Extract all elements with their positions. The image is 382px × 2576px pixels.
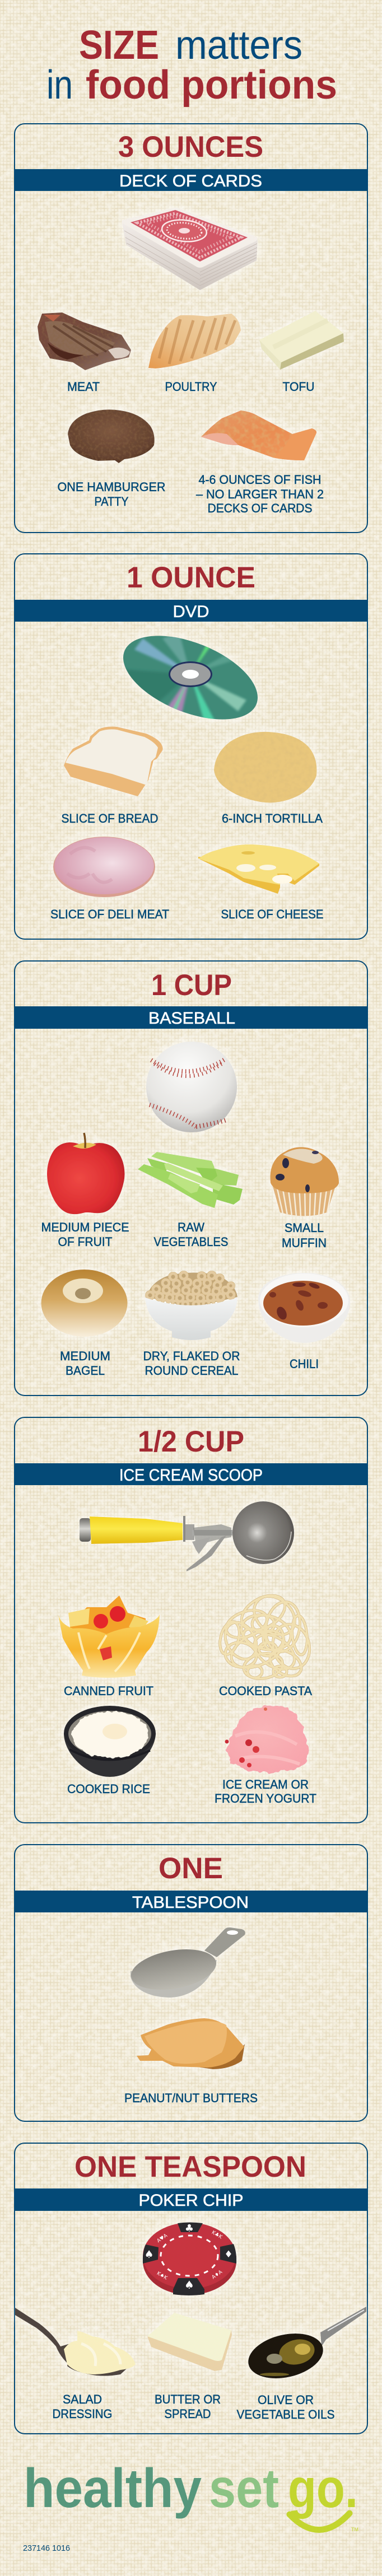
band: poker chip: POKER CHIP — [139, 2191, 243, 2210]
label: bagel — [60, 1349, 110, 1378]
icon: baseball — [146, 1042, 237, 1132]
label: cereal — [143, 1349, 240, 1378]
label: chili: CHILI — [290, 1357, 319, 1371]
label: one hamburger patty — [57, 480, 166, 508]
icon: poker chip: ♦ — [224, 2249, 233, 2260]
heading: 1/2 cup: 1/2 CUP — [138, 1425, 244, 1458]
icon: cheese — [198, 844, 319, 894]
label: small muffin: MUFFIN — [282, 1236, 327, 1250]
icon: ice cream scoop — [80, 1501, 294, 1571]
band: tablespoon — [14, 1891, 368, 1912]
label: fruit — [41, 1220, 129, 1249]
code number: 237146 1016 — [23, 2544, 70, 2553]
icon: poker chip — [143, 2222, 236, 2295]
icon: canned fruit — [58, 1595, 160, 1678]
label: fish: – NO LARGER THAN 2 — [196, 487, 324, 501]
label: butter or spread: SPREAD — [165, 2407, 211, 2421]
icon: butter — [147, 2313, 232, 2371]
icon: bread — [64, 727, 163, 796]
label: ice cream or frozen yogurt — [215, 1777, 316, 1805]
label: cooked pasta: COOKED PASTA — [219, 1684, 312, 1698]
title: in — [46, 63, 73, 108]
icon: chili — [258, 1273, 350, 1343]
label: poultry: POULTRY — [165, 380, 217, 394]
label: oils: VEGETABLE OILS — [236, 2407, 335, 2421]
icon: celery — [138, 1152, 243, 1208]
title: food portions — [86, 63, 337, 108]
icon: pasta — [217, 1588, 314, 1682]
label: meat: MEAT — [67, 380, 100, 394]
icon: deck of cards — [122, 208, 258, 290]
icon: poker chip: A♥A — [156, 2233, 169, 2244]
icon: poker chip: ♣ — [185, 2223, 194, 2234]
icon: poultry — [148, 314, 241, 368]
heading: one teaspoon: ONE TEASPOON — [74, 2150, 306, 2183]
label: one hamburger patty: PATTY — [94, 494, 129, 508]
icon: tofu — [259, 311, 344, 370]
label: raw vegetables: RAW — [178, 1220, 204, 1234]
label: butter or spread — [155, 2392, 221, 2421]
title: SIZE — [79, 23, 159, 68]
panel: 3 ounces — [14, 124, 368, 533]
icon: muffin — [270, 1147, 339, 1217]
panel: 1 cup — [14, 961, 368, 1396]
panel: one teaspoon — [14, 2143, 368, 2434]
icon: tablespoon — [128, 1928, 245, 1998]
icon: tortilla — [214, 732, 316, 802]
icon: poker chip: K♠K — [156, 2271, 169, 2281]
label: tortilla: 6-INCH TORTILLA — [222, 811, 323, 825]
band: ice cream scoop — [14, 1463, 368, 1485]
panel: 1/2 cup — [14, 1417, 368, 1823]
label: cooked rice: COOKED RICE — [67, 1782, 150, 1796]
icon: cooked rice — [64, 1706, 156, 1777]
label: bagel: MEDIUM — [60, 1349, 110, 1363]
logo: healthy set go: go. — [288, 2457, 358, 2519]
label: small muffin — [282, 1221, 327, 1250]
label: one hamburger patty: ONE HAMBURGER — [57, 480, 166, 494]
band: deck of cards: DECK OF CARDS — [119, 172, 262, 190]
label: deli meat: SLICE OF DELI MEAT — [50, 907, 169, 921]
band: deck of cards — [14, 169, 368, 191]
label: raw vegetables — [153, 1220, 229, 1249]
icon: poker chip: K♣K — [211, 2230, 223, 2241]
label: fruit: OF FRUIT — [58, 1235, 112, 1249]
label: canned fruit: CANNED FRUIT — [64, 1684, 153, 1698]
label: ice cream or frozen yogurt: ICE CREAM OR — [222, 1777, 309, 1791]
label: cereal: ROUND CEREAL — [145, 1364, 239, 1378]
heading: 1 cup: 1 CUP — [151, 969, 232, 1002]
panel: 1 ounce — [14, 554, 368, 939]
band: dvd — [14, 600, 368, 622]
label: fish: DECKS OF CARDS — [207, 501, 313, 515]
logo: healthy set go: set — [209, 2457, 279, 2519]
title: matters — [175, 23, 302, 68]
label: fish — [196, 473, 324, 515]
label: fish: 4-6 OUNCES OF FISH — [198, 473, 322, 487]
label: slice of bread: SLICE OF BREAD — [62, 811, 158, 825]
title — [46, 23, 337, 108]
band: baseball — [14, 1006, 368, 1029]
label: salad dressing: DRESSING — [53, 2407, 112, 2421]
label: salad dressing — [53, 2392, 112, 2421]
icon: peanut butter — [137, 2018, 245, 2069]
heading: one: ONE — [159, 1852, 223, 1885]
label: small muffin: SMALL — [285, 1221, 324, 1235]
icon: ice cream — [225, 1706, 308, 1773]
icon: poker chip: A♦A — [211, 2269, 224, 2280]
label: cereal: DRY, FLAKED OR — [143, 1349, 240, 1363]
label: salad dressing: SALAD — [63, 2392, 102, 2406]
label: oils — [236, 2393, 335, 2421]
heading: 1 ounce: 1 OUNCE — [127, 561, 255, 594]
icon: poker chip: ♠ — [184, 2278, 194, 2292]
icon: dvd — [119, 631, 262, 725]
logo: healthy set go: healthy — [24, 2457, 202, 2519]
logo: healthy set go — [24, 2457, 358, 2532]
label: fruit: MEDIUM PIECE — [41, 1220, 129, 1234]
band: tablespoon: TABLESPOON — [132, 1893, 249, 1912]
label: ice cream or frozen yogurt: FROZEN YOGURT — [215, 1791, 316, 1805]
band: ice cream scoop: ICE CREAM SCOOP — [119, 1466, 263, 1485]
label: peanut butters: PEANUT/NUT BUTTERS — [124, 2091, 258, 2105]
label: raw vegetables: VEGETABLES — [153, 1235, 229, 1249]
icon: spoon of salad dressing — [15, 2308, 136, 2376]
band: poker chip — [14, 2188, 368, 2211]
panel: one tablespoon — [14, 1845, 368, 2121]
heading: 3 ounces: 3 OUNCES — [118, 130, 263, 164]
label: tofu: TOFU — [282, 380, 315, 394]
icon: salmon — [201, 410, 316, 460]
icon: spoon of oil — [244, 2307, 366, 2385]
band: baseball: BASEBALL — [148, 1009, 235, 1028]
label: bagel: BAGEL — [66, 1364, 105, 1378]
icon: poker chip: ♠ — [144, 2248, 154, 2261]
icon: apple — [47, 1133, 125, 1214]
label: oils: OLIVE OR — [258, 2393, 314, 2407]
band: dvd: DVD — [173, 603, 209, 621]
label: butter or spread: BUTTER OR — [155, 2392, 221, 2406]
icon: deli meat — [53, 837, 155, 897]
icon: meat — [38, 312, 131, 370]
icon: cereal — [145, 1272, 237, 1340]
label: cheese: SLICE OF CHEESE — [221, 907, 324, 921]
logo: healthy set go: TM — [351, 2527, 358, 2532]
icon: bagel — [41, 1270, 128, 1337]
icon: hamburger patty — [68, 409, 155, 463]
